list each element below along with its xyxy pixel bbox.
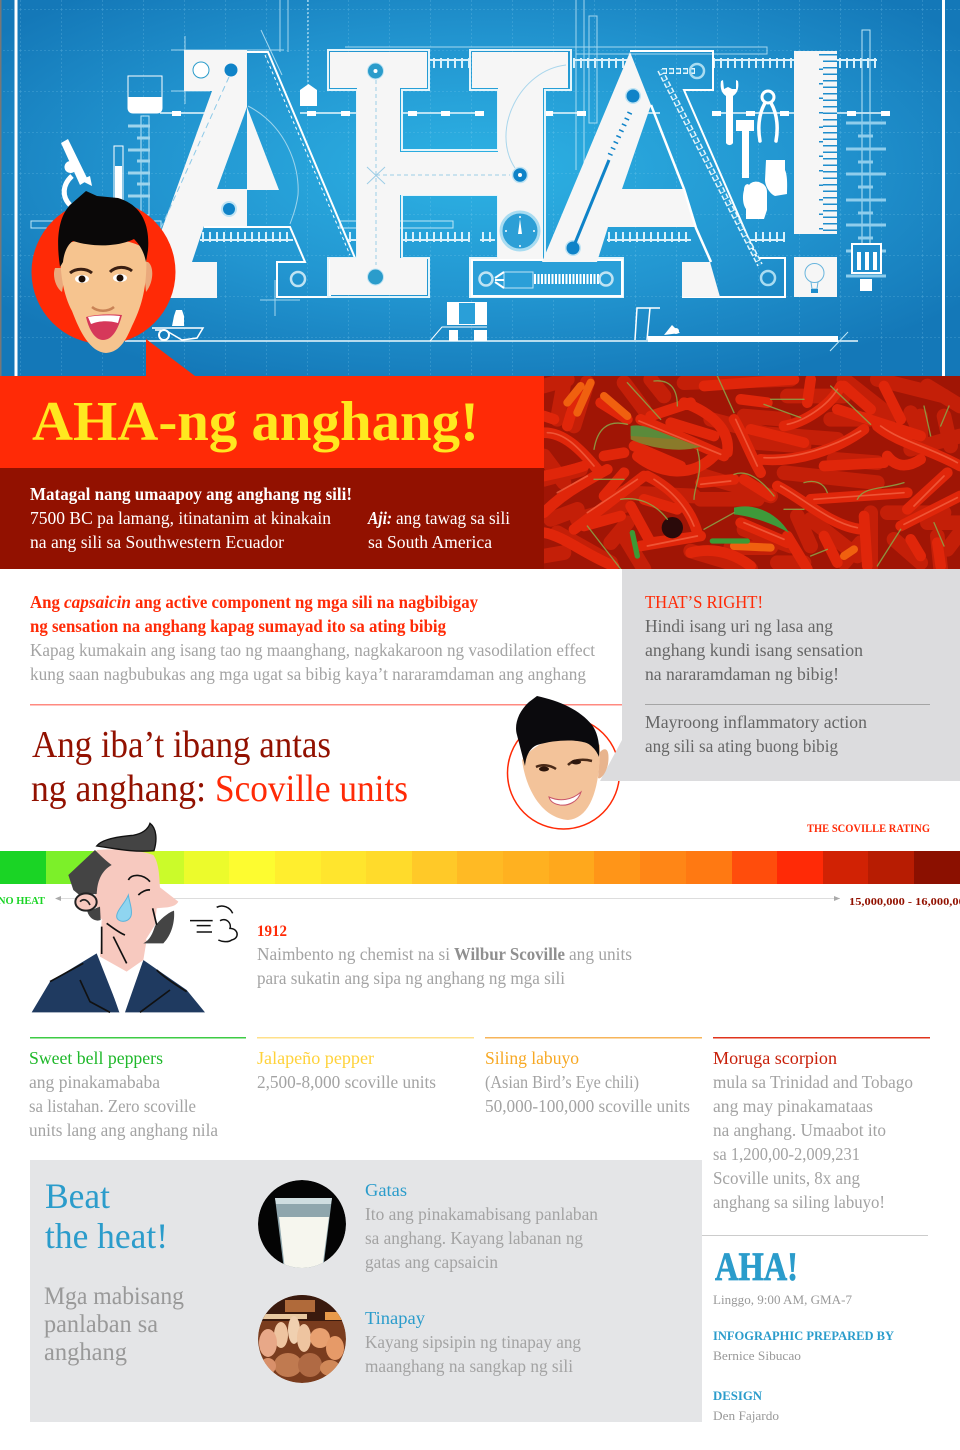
capsaicin explanation text: capsaicin: [64, 592, 131, 612]
blueprint hero illustration: [0, 0, 960, 376]
panel: that's right: [600, 569, 960, 781]
history note 1912: para sukatin ang sipa ng anghang ng mga sili: [257, 968, 565, 988]
column: jalapeno pepper: 2,500-8,000 scoville units: [257, 1072, 436, 1092]
column: moruga scorpion: [713, 1037, 930, 1212]
panel: that's right: Hindi isang uri ng lasa ang: [645, 616, 833, 636]
history note 1912: [257, 923, 632, 988]
scale axis with end labels: [0, 895, 960, 908]
exclamation mark: [794, 51, 837, 297]
photo: glass of milk: [258, 1180, 346, 1270]
capsaicin explanation text: kung saan nagbubukas ang mga ugat sa bibig kaya’t nararamdaman ang anghang: [30, 664, 586, 684]
program credits: INFOGRAPHIC PREPARED BY: [713, 1328, 895, 1343]
text: gatas: gatas ang capsaicin: [365, 1252, 498, 1272]
host portrait in red circle with speech pointer: [32, 191, 195, 376]
origin facts panel: [0, 468, 544, 569]
text: tinapay: Tinapay: [365, 1308, 425, 1328]
panel: that's right: THAT’S RIGHT!: [645, 592, 763, 612]
column: siling labuyo: [485, 1037, 702, 1116]
heading: beat the heat: the heat!: [45, 1216, 168, 1256]
heading: levels of heat: Ang iba’t ibang antas: [32, 724, 331, 766]
panel: that's right: Mayroong inflammatory action: [645, 712, 867, 732]
column: moruga scorpion: mula sa Trinidad and Tobago: [713, 1072, 913, 1092]
text: tinapay: Kayang sipsipin ng tinapay ang: [365, 1332, 581, 1352]
column: sweet bell peppers: units lang ang anghang nila: [29, 1120, 218, 1140]
column: moruga scorpion: ang may pinakamataas: [713, 1096, 873, 1116]
program credits: AHA!: [715, 1244, 798, 1289]
column: moruga scorpion: Scoville units, 8x ang: [713, 1168, 860, 1188]
column: siling labuyo: 50,000-100,000 scoville units: [485, 1096, 690, 1116]
panel: that's right: anghang kundi isang sensation: [645, 640, 863, 660]
capsaicin explanation text: ang active component ng mga sili na nagbibigay: [135, 592, 478, 612]
origin facts panel: na ang sili sa Southwestern Ecuador: [30, 532, 284, 552]
letter A right: [542, 51, 785, 297]
letter H: [328, 50, 623, 297]
column: siling labuyo: (Asian Bird’s Eye chili): [485, 1072, 639, 1093]
history note 1912: ang units: [569, 944, 632, 964]
letter A left: [150, 50, 355, 298]
text: gatas: Gatas: [365, 1180, 407, 1200]
capsaicin explanation text: Kapag kumakain ang isang tao ng maanghang, nagkakaroon ng vasodilation effect: [30, 640, 595, 660]
scoville rating label: THE SCOVILLE RATING: [807, 823, 930, 835]
workshop tools: [721, 80, 787, 219]
heading: levels of heat: ng anghang:: [31, 768, 206, 810]
origin facts panel: sa South America: [368, 532, 492, 552]
column: jalapeno pepper: [257, 1037, 474, 1092]
column: moruga scorpion: na anghang. Umaabot ito: [713, 1120, 886, 1140]
text: gatas: Ito ang pinakamabisang panlaban: [365, 1204, 598, 1224]
column: siling labuyo: Siling labuyo: [485, 1048, 579, 1068]
photo: bread: [258, 1295, 346, 1383]
text: tinapay: [365, 1308, 581, 1376]
heading: beat the heat: [45, 1176, 168, 1256]
scoville colour scale: [0, 851, 960, 884]
origin facts panel: 7500 BC pa lamang, itinatanim at kinakain: [30, 508, 331, 528]
text: gatas: [365, 1180, 598, 1272]
history note 1912: Naimbento ng chemist na si: [257, 944, 450, 964]
ladder, elevator and baseline scene: [125, 30, 886, 351]
history note 1912: 1912: [257, 923, 287, 940]
program credits: Linggo, 9:00 AM, GMA-7: [713, 1292, 852, 1307]
program credits: [713, 1244, 895, 1423]
heading: beat the heat: Beat: [45, 1176, 110, 1216]
photo: red chili peppers: [544, 376, 960, 569]
science glassware and microscope: [61, 0, 317, 215]
origin facts panel: Matagal nang umaapoy ang anghang ng sili!: [30, 484, 352, 504]
origin facts panel: ang tawag sa sili: [396, 508, 510, 528]
heading: levels of heat: [31, 724, 408, 810]
column: sweet bell peppers: sa listahan. Zero scoville: [29, 1096, 196, 1116]
program credits: Den Fajardo: [713, 1408, 779, 1423]
column: sweet bell peppers: [29, 1037, 246, 1140]
capsaicin explanation text: [30, 592, 595, 684]
column: sweet bell peppers: ang pinakamababa: [29, 1072, 160, 1092]
history note 1912: Wilbur Scoville: [454, 944, 565, 964]
text: tinapay: maanghang na sangkap ng sili: [365, 1356, 573, 1376]
subheading: remedies: anghang: [44, 1339, 127, 1366]
panel: beat the heat: [30, 1160, 702, 1422]
panel: that's right: ang sili sa ating buong bibig: [645, 736, 838, 756]
rails and measuring strips: [31, 58, 890, 242]
subheading: remedies: panlaban sa: [44, 1311, 158, 1338]
origin facts panel: Aji:: [367, 508, 392, 528]
column: moruga scorpion: Moruga scorpion: [713, 1048, 837, 1068]
subheading: remedies: [44, 1283, 184, 1366]
subheading: remedies: Mga mabisang: [44, 1283, 184, 1310]
column: jalapeno pepper: Jalapeño pepper: [257, 1048, 374, 1068]
capsaicin explanation text: Ang: [30, 592, 60, 612]
title: AHA-ng anghang!: [32, 391, 479, 453]
program credits: Bernice Sibucao: [713, 1348, 801, 1363]
capsaicin explanation text: ng sensation na anghang kapag sumayad ito sa ating bibig: [30, 616, 446, 636]
title banner: [0, 376, 544, 468]
column: moruga scorpion: sa 1,200,00-2,009,231: [713, 1144, 860, 1164]
column: moruga scorpion: anghang sa siling labuyo!: [713, 1192, 885, 1212]
illustration: Wilbur Scoville blowing: [32, 823, 237, 1012]
heading: levels of heat: Scoville units: [215, 768, 408, 810]
host portrait, smiling: [516, 696, 609, 820]
scale axis with end labels: 15,000,000 - 16,000,000: [849, 896, 960, 908]
panel: that's right: na nararamdaman ng bibig!: [645, 664, 839, 684]
text: gatas: sa anghang. Kayang labanan ng: [365, 1228, 583, 1248]
column: sweet bell peppers: Sweet bell peppers: [29, 1048, 163, 1068]
program credits: DESIGN: [713, 1388, 763, 1403]
